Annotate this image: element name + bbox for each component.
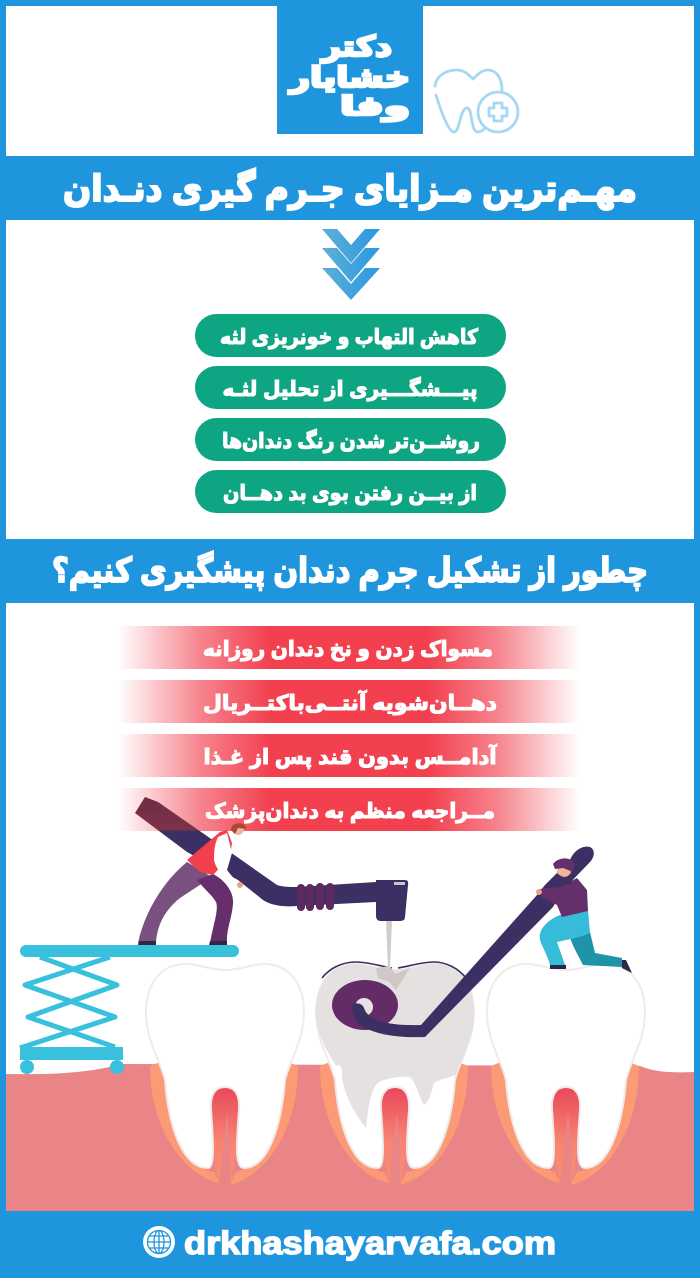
prevention bar 4: مــراجعه منظم به دندان‌پزشک — [205, 800, 495, 823]
icon: globe — [143, 1226, 175, 1258]
prevention bar 1: مسواک زدن و نخ دندان روزانه — [203, 638, 493, 661]
big drill handpiece — [135, 797, 408, 968]
footer website: drkhashayarvafa.com — [184, 1225, 556, 1261]
person: left man carrying drill — [138, 823, 247, 945]
benefit pill 2: پیـــشگـــیری از تحلیل لثـه — [222, 376, 478, 401]
panel: benefits — [6, 220, 694, 539]
tooth: right — [487, 964, 645, 1185]
enamel crack — [376, 966, 410, 990]
prevention bar 1 — [118, 626, 580, 669]
benefit pill 3: روشــن‌تر شدن رنگ دندان‌ها — [222, 428, 480, 453]
benefit pill 2 — [195, 366, 506, 409]
person: right man pushing tool — [536, 858, 632, 973]
benefit pill 1 — [195, 314, 506, 357]
benefit pill 3 — [195, 418, 506, 461]
logo block — [277, 0, 423, 134]
scissor lift — [20, 945, 239, 1074]
tooth: left — [146, 964, 304, 1185]
panel: prevention and illustration — [6, 603, 694, 1211]
gum — [6, 1064, 694, 1211]
icon: triple chevron arrow — [322, 229, 380, 300]
logo block: خشایار — [288, 62, 410, 94]
heading: main title: مهـم‌ترین مـزایای جـرم گیری دنـدان — [63, 168, 637, 210]
prevention bar 2 — [118, 680, 580, 723]
prevention bar 2: دهــان‌شویه آنتــی‌باکتــریال — [203, 690, 497, 715]
prevention bar 3: آدامــس بدون قند پس از غـذا — [204, 744, 497, 769]
tooth: middle with plaque — [316, 962, 474, 1185]
benefit pill 4 — [195, 470, 506, 513]
purple cavity and long scaler tool — [332, 847, 594, 1037]
panel: logo area — [6, 0, 694, 156]
logo block: وفا — [340, 91, 410, 122]
plaque coating — [316, 964, 474, 1128]
benefit pill 1: کاهش التهاب و خونریزی لثه — [220, 326, 479, 349]
prevention bar 4 — [118, 788, 580, 831]
prevention bar 3 — [118, 734, 580, 777]
benefit pill 4: از بیــن رفتن بوی بد دهــان — [223, 482, 477, 505]
icon: tooth with plus — [435, 70, 518, 132]
logo block: دکتر — [320, 31, 392, 63]
